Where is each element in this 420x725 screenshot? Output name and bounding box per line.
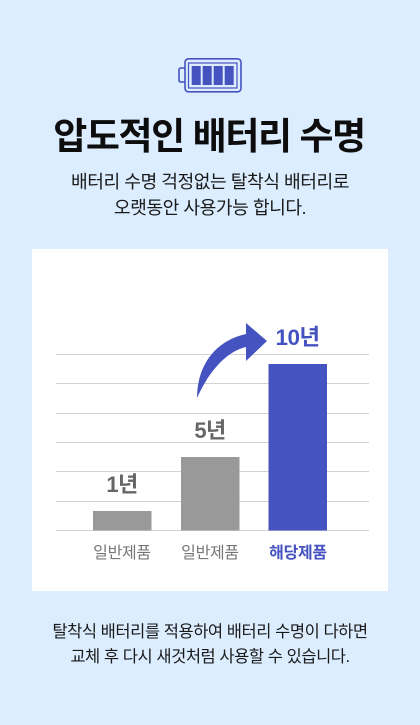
title: 압도적인 배터리 수명	[53, 116, 365, 157]
subtitle	[71, 172, 349, 218]
label: 1 year: 1년	[106, 472, 138, 497]
panel: chart card	[32, 249, 388, 591]
subtitle: 배터리 수명 걱정없는 탈착식 배터리로	[71, 172, 349, 192]
subtitle: 오랫동안 사용가능 합니다.	[114, 198, 306, 218]
arrow	[197, 323, 267, 398]
label: 10 years: 10년	[276, 325, 319, 350]
category label 2: 일반제품	[181, 545, 239, 562]
footer text: 교체 후 다시 새것처럼 사용할 수 있습니다.	[70, 648, 350, 666]
bar chart	[56, 323, 369, 531]
category label 3: 해당제품	[269, 545, 327, 562]
footer text: 탈착식 배터리를 적용하여 배터리 수명이 다하면	[52, 623, 368, 641]
category label 1: 일반제품	[93, 545, 151, 562]
footer text	[52, 623, 368, 666]
icon: battery	[178, 58, 242, 93]
label: 5 years: 5년	[194, 418, 226, 443]
